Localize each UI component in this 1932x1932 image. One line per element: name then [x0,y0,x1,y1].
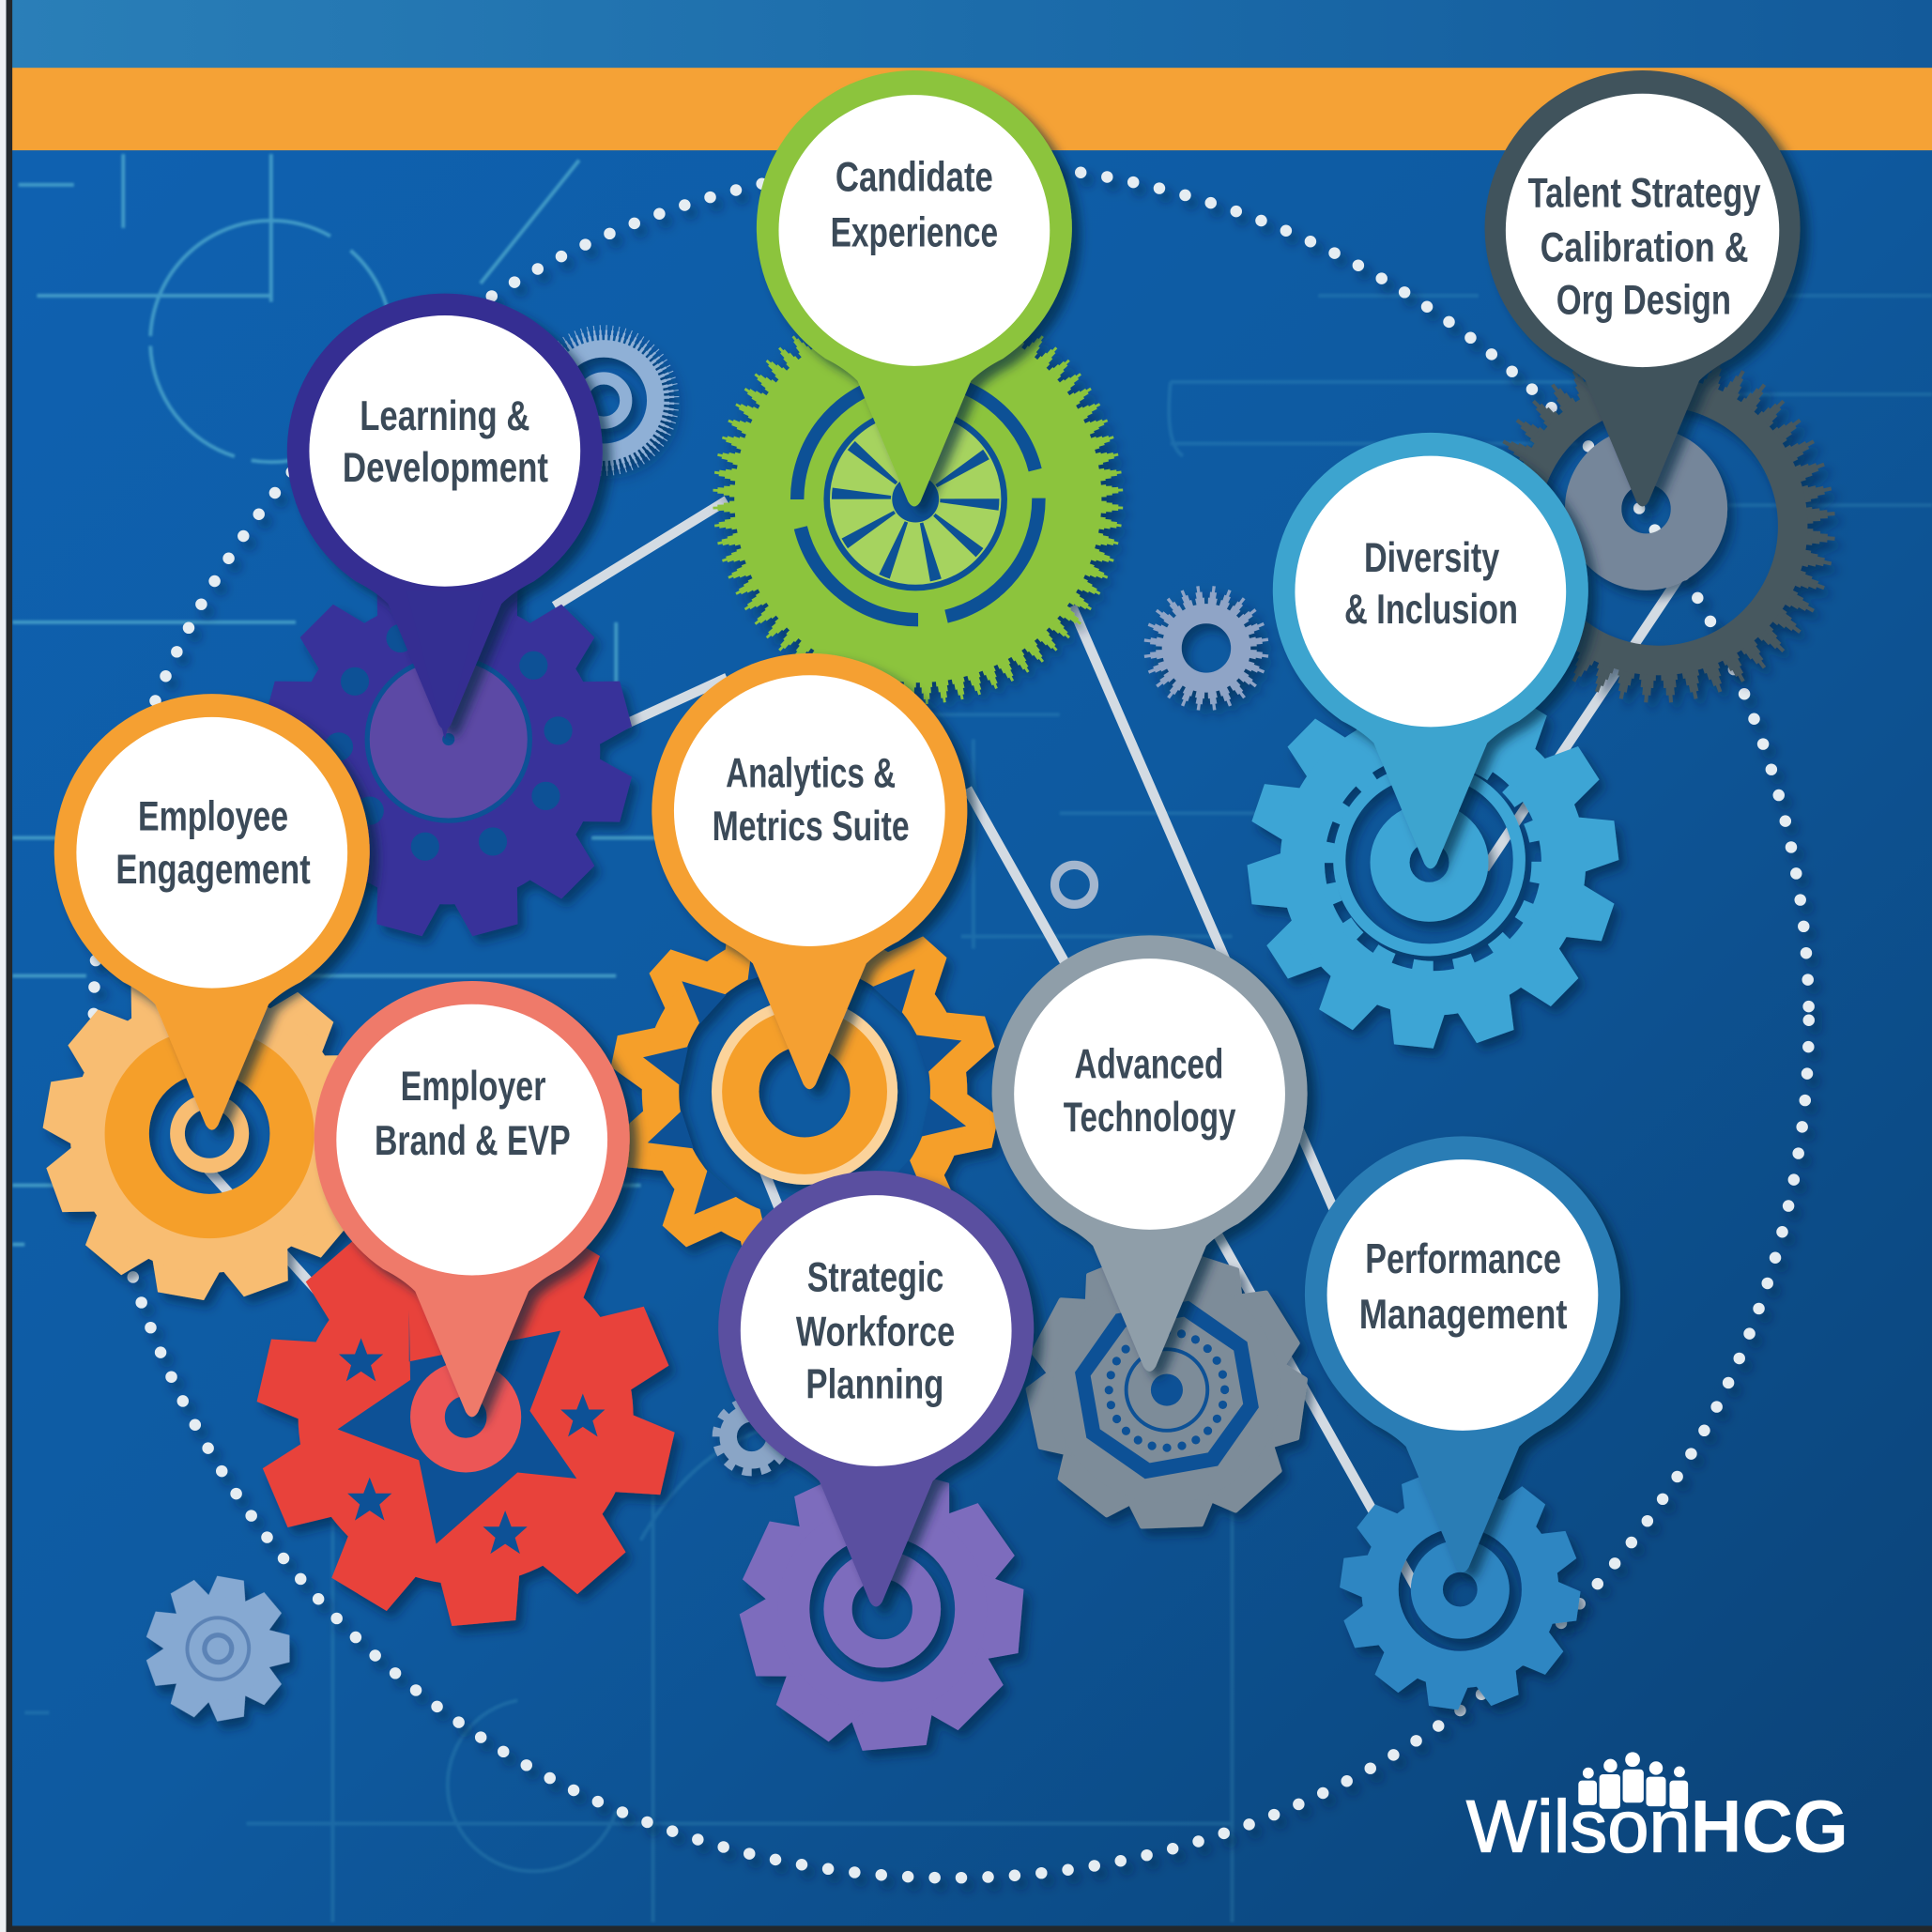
pin: strategic workforce planning [718,1171,1034,1607]
pin: strategic workforce planning: Strategic [807,1254,943,1300]
gear: green (candidate experience) [716,297,1120,701]
pin: learning and development: Development [343,445,548,491]
pin: employee engagement: Engagement [115,847,311,893]
gear: dark slate (talent strategy) [1486,354,1831,698]
pin: advanced technology: Advanced [1074,1041,1223,1087]
small ring [1055,865,1095,904]
pin: advanced technology: Technology [1064,1095,1236,1141]
pin: employer brand and EVP: Employer [401,1064,545,1110]
pin: candidate experience: Experience [831,210,998,256]
gear: red (employer brand) [239,1192,692,1641]
pin: talent strategy: Talent Strategy [1528,171,1761,217]
pin: candidate experience: Candidate [836,154,993,200]
gear: small pale centre [1147,589,1265,707]
pin: performance management: Management [1359,1292,1568,1338]
pin: diversity and inclusion: & Inclusion [1344,587,1518,633]
pin: strategic workforce planning: Workforce [796,1309,955,1355]
pin: performance management [1305,1136,1620,1572]
pin: strategic workforce planning: Planning [805,1362,943,1408]
pin: employee engagement: Employee [138,794,288,840]
pin: analytics and metrics suite: Analytics & [726,751,896,797]
connector belts [204,500,1679,1589]
pin: talent strategy: Org Design [1556,278,1731,324]
gear: light orange (employee engagement) [18,943,401,1325]
orange band [11,68,1932,150]
pin: advanced technology [992,935,1308,1372]
pin: talent strategy [1485,70,1801,506]
gear: mid blue (performance management) [1326,1454,1595,1725]
pin: analytics and metrics suite [652,653,967,1089]
pin: diversity and inclusion [1273,433,1588,868]
logo: WilsonHCG: HCG [1691,1786,1848,1868]
gear: bright blue (diversity & inclusion) [1228,659,1638,1066]
gear: grey (advanced technology) [989,1218,1342,1568]
pin: performance management: Performance [1365,1236,1561,1282]
pin: employee engagement [54,694,370,1130]
logo: WilsonHCG [1466,1752,1848,1868]
pin: learning and development: Learning & [360,393,529,439]
pin: learning and development [287,294,603,740]
logo: WilsonHCG: Wilson [1466,1786,1691,1868]
gear: violet (strategic workforce planning) [704,1437,1058,1787]
pin: analytics and metrics suite: Metrics Suite [713,804,910,850]
gear: small pale behind strategic pin [717,1403,786,1471]
pin: diversity and inclusion: Diversity [1364,535,1499,581]
pin: employer brand and EVP: Brand & EVP [375,1118,571,1164]
pin: employer brand and EVP [314,981,630,1417]
gear: small pale top-left [531,328,677,473]
gear: small pale bottom-left [132,1566,303,1734]
gear: orange (analytics & metrics) [574,861,1035,1323]
dotted circle [94,162,1809,1878]
gear: deep purple (learning & development) [221,526,674,978]
pin: talent strategy: Calibration & [1541,224,1748,270]
pin: candidate experience [757,70,1072,506]
